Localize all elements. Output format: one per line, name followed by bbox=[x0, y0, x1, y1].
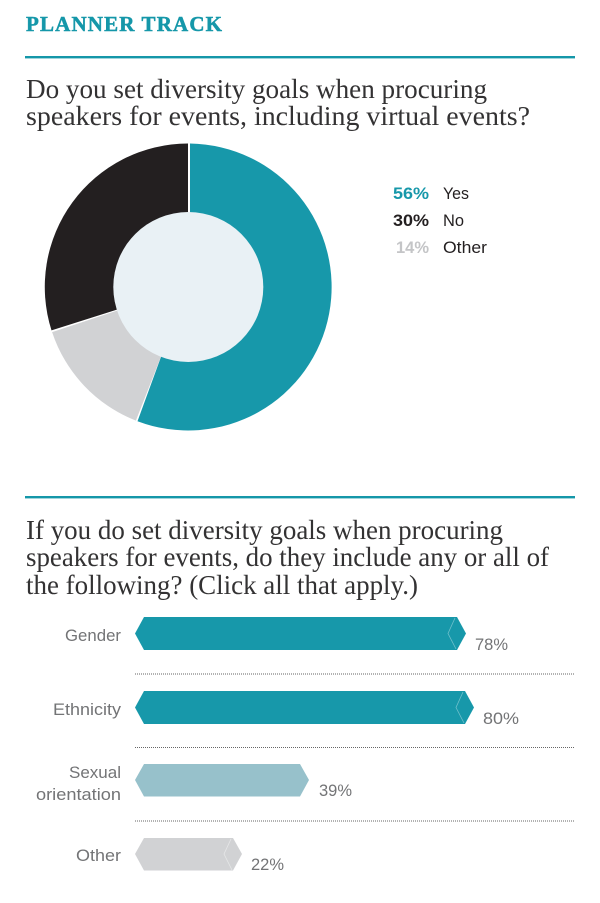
row: gender 78%: Gender bbox=[65, 627, 122, 645]
row: ethnicity 80%: Ethnicity bbox=[53, 701, 122, 719]
row: gender 78%: 78% bbox=[475, 635, 508, 654]
row: other 22% bbox=[76, 838, 284, 874]
row: gender 78% bbox=[65, 617, 508, 654]
legend: other bbox=[396, 238, 487, 257]
row: sexual orientation 39% bbox=[36, 764, 352, 804]
question 1 bbox=[26, 74, 530, 131]
question 1: Do you set diversity goals when procuring bbox=[26, 74, 487, 104]
question 1: speakers for events, including virtual events? bbox=[26, 101, 530, 131]
donut hole bbox=[113, 212, 263, 362]
question 2: If you do set diversity goals when procuring bbox=[26, 515, 503, 545]
donut chart bbox=[45, 144, 332, 430]
row: other 22%: Other bbox=[76, 847, 122, 865]
legend: no: 30% bbox=[393, 211, 429, 230]
legend: yes: 56% bbox=[393, 184, 429, 203]
row: ethnicity 80% bbox=[53, 691, 519, 728]
row: ethnicity 80%: 80% bbox=[483, 709, 519, 728]
legend bbox=[393, 184, 487, 257]
legend: other: 14% bbox=[396, 238, 429, 257]
slice: other 14% bbox=[52, 287, 188, 421]
bar chart bbox=[36, 617, 575, 874]
legend: no: No bbox=[443, 211, 464, 230]
question 2: speakers for events, do they include any or all of bbox=[26, 542, 549, 572]
question 2 bbox=[26, 515, 549, 600]
row: other 22%: 22% bbox=[251, 855, 284, 874]
legend: other: Other bbox=[443, 238, 487, 257]
question 2: the following? (Click all that apply.) bbox=[26, 570, 418, 600]
slice: yes 56% bbox=[138, 144, 332, 430]
row: sexual orientation 39%: 39% bbox=[319, 781, 352, 800]
top rule bbox=[25, 56, 575, 58]
legend: no bbox=[393, 211, 464, 230]
row: sexual orientation 39%: Sexual bbox=[69, 764, 121, 782]
middle rule bbox=[25, 496, 575, 498]
slice: no 30% bbox=[45, 144, 188, 330]
row: sexual orientation 39%: orientation bbox=[36, 786, 121, 804]
title: PLANNER TRACK bbox=[26, 12, 223, 36]
legend: yes bbox=[393, 184, 469, 203]
legend: yes: Yes bbox=[443, 184, 469, 203]
